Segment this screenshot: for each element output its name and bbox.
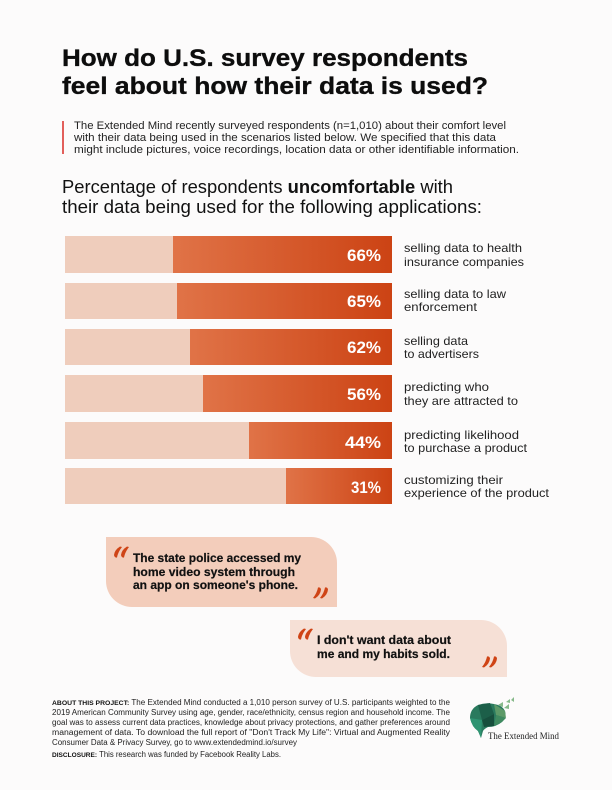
bar: 65% law enforcement — [65, 283, 506, 319]
bar: 62% advertisers: selling data — [404, 334, 468, 348]
bar: 62% advertisers — [65, 329, 479, 365]
logo: The Extended Mind — [470, 697, 559, 742]
intro text block: might include pictures, voice recordings, location data or other identifiable information. — [74, 144, 519, 156]
bar: 56% attraction: predicting who — [404, 380, 489, 394]
bar: 65% law enforcement: 65% — [347, 292, 381, 311]
chart heading: Percentage of respondents uncomfortable with — [62, 177, 453, 197]
title — [62, 45, 488, 100]
bar: 31% customizing experience — [65, 468, 550, 504]
disclosure: DISCLOSURE: This research was funded by Facebook Reality Labs. — [52, 750, 281, 759]
title: How do U.S. survey respondents — [62, 45, 468, 72]
callout: police quote: home video system through — [133, 565, 295, 579]
callout: data habits quote — [290, 620, 507, 677]
about this project footnote: goal was to assess current data practices, knowledge about privacy protections, and gather preferences around — [52, 718, 450, 727]
bar: 44% purchase likelihood — [65, 422, 528, 459]
bar: 31% customizing experience: customizing their — [404, 473, 503, 487]
bar: 44% purchase likelihood: 44% — [345, 433, 381, 452]
intro text block: The Extended Mind recently surveyed respondents (n=1,010) about their comfort level — [74, 120, 506, 132]
icon: opening quote mark — [114, 546, 129, 558]
about this project footnote: 2019 American Community Survey using age, gender, race/ethnicity, census region and household income. The — [52, 708, 450, 717]
icon: green brain — [470, 697, 514, 738]
callout: police quote: an app on someone's phone. — [133, 578, 298, 592]
logo: The Extended Mind: The Extended Mind — [488, 731, 559, 742]
bar: 44% purchase likelihood: predicting likelihood — [404, 428, 519, 442]
bar: 56% attraction: they are attracted to — [404, 394, 518, 408]
bar: 66% health insurance: selling data to health — [404, 241, 522, 255]
about this project footnote — [52, 698, 450, 747]
bar: 62% advertisers: to advertisers — [404, 347, 479, 361]
about this project footnote: Consumer Data & Privacy Survey, go to www.extendedmind.io/survey — [52, 738, 297, 747]
bar chart — [65, 236, 550, 504]
callout: police quote: The state police accessed my — [133, 551, 301, 565]
chart heading: their data being used for the following applications: — [62, 197, 482, 217]
bar: 65% law enforcement: selling data to law — [404, 287, 506, 301]
bar: 66% health insurance — [65, 236, 524, 273]
callout: police quote — [106, 537, 337, 607]
title: feel about how their data is used? — [62, 73, 488, 100]
icon: closing quote mark — [482, 656, 497, 668]
intro text block — [62, 120, 519, 156]
intro text block: with their data being used in the scenarios listed below. We specified that this data — [73, 132, 496, 144]
bar: 31% customizing experience: 31% — [351, 478, 381, 497]
bar: 66% health insurance: insurance companies — [404, 255, 524, 269]
bar: 66% health insurance: 66% — [347, 246, 381, 265]
chart heading — [62, 177, 482, 217]
callout: data habits quote: me and my habits sold. — [317, 647, 450, 661]
bar: 65% law enforcement: enforcement — [404, 300, 478, 314]
icon: opening quote mark — [298, 628, 313, 640]
bar: 31% customizing experience: experience of the product — [404, 486, 550, 500]
bar: 44% purchase likelihood: to purchase a product — [404, 441, 528, 455]
bar: 56% attraction — [65, 375, 518, 412]
about this project footnote: management of data. To download the full report of "Don't Track My Life": Virtual and Augmented Reality — [52, 728, 450, 737]
bar: 56% attraction: 56% — [347, 385, 381, 404]
icon: closing quote mark — [313, 587, 328, 598]
bar: 62% advertisers: 62% — [347, 338, 381, 357]
about this project footnote: ABOUT THIS PROJECT: The Extended Mind conducted a 1,010 person survey of U.S. participants weighted to the — [52, 698, 450, 707]
callout: data habits quote: I don't want data about — [317, 633, 451, 647]
